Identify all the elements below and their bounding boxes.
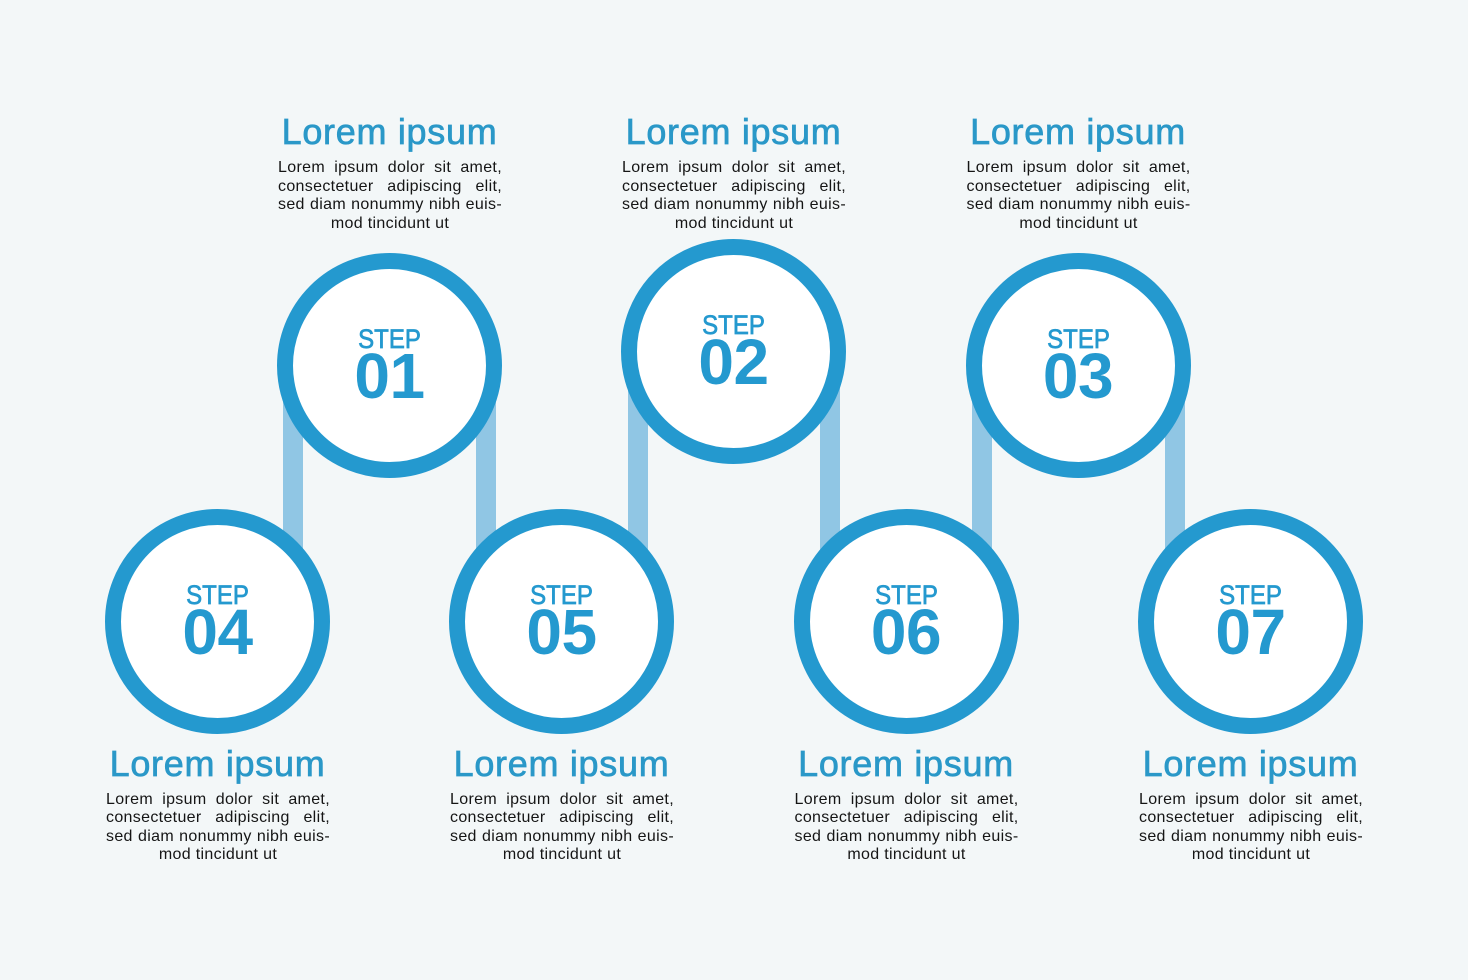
text block: step 02: sed diam nonummy nibh euis- [622,196,846,213]
circle: step 06: STEP [875,580,937,610]
text block: step 07: consectetuer adipiscing elit, [1139,809,1363,826]
text block: step 07: Lorem ipsum dolor sit amet, [1139,791,1363,808]
text block: step 02: consectetuer adipiscing elit, [622,178,846,195]
text block: step 03: sed diam nonummy nibh euis- [966,196,1190,213]
text block: step 06: Lorem ipsum dolor sit amet, [794,791,1018,808]
circle: step 06 [794,508,1018,734]
heading: step 04: Lorem ipsum [110,742,325,784]
connector: step 06 to step 03 [972,390,992,560]
text block: step 06: consectetuer adipiscing elit, [794,809,1018,826]
heading: step 05: Lorem ipsum [454,742,669,784]
circle: step 02: STEP [702,310,765,340]
text block: step 01: mod tincidunt ut [331,215,449,232]
connector: step 03 to step 07 [1165,390,1185,560]
text block: step 05: Lorem ipsum dolor sit amet, [450,791,674,808]
text block: step 04 [106,791,330,863]
circle: step 04 [105,508,330,734]
text block: step 03: consectetuer adipiscing elit, [966,178,1190,195]
text block: step 02: Lorem ipsum dolor sit amet, [622,159,846,176]
text block: step 04: Lorem ipsum dolor sit amet, [106,791,330,808]
text block: step 02: mod tincidunt ut [675,215,793,232]
text block: step 03: mod tincidunt ut [1019,215,1138,232]
heading: step 06: Lorem ipsum [798,742,1014,784]
circle: step 05: 05 [526,596,597,668]
text block: step 07: sed diam nonummy nibh euis- [1139,828,1363,845]
text block: step 04: sed diam nonummy nibh euis- [106,828,330,845]
text block: step 06 [794,791,1018,863]
text block: step 04: consectetuer adipiscing elit, [106,809,330,826]
circle: step 03 [966,252,1190,478]
text block: step 02 [622,159,846,232]
text block: step 04: mod tincidunt ut [159,846,277,863]
heading: step 07: Lorem ipsum [1143,742,1358,784]
text block: step 03: Lorem ipsum dolor sit amet, [966,159,1190,176]
text block: step 06: mod tincidunt ut [847,846,966,863]
text block: step 01: Lorem ipsum dolor sit amet, [278,159,502,176]
circle: step 05: STEP [530,580,593,610]
circle: step 01 [277,252,502,478]
circle: step 07: 07 [1215,596,1286,668]
text block: step 01 [278,159,502,232]
circle: step 03: STEP [1047,324,1109,354]
circle: step 04: 04 [182,596,253,668]
text block: step 05: sed diam nonummy nibh euis- [450,828,674,845]
heading: step 01: Lorem ipsum [282,110,497,152]
text block: step 01: sed diam nonummy nibh euis- [278,196,502,213]
connector: step 01 to step 05 [476,390,496,560]
heading: step 02: Lorem ipsum [626,110,841,152]
text block: step 05: mod tincidunt ut [503,846,621,863]
connector: step 04 to step 01 [283,390,303,560]
text block: step 03 [966,159,1190,232]
circle: step 03: 03 [1043,340,1113,412]
circle: step 05 [449,508,674,734]
heading: step 03: Lorem ipsum [970,110,1186,152]
circle: step 01: 01 [354,340,425,412]
circle: step 07 [1138,508,1363,734]
text block: step 05: consectetuer adipiscing elit, [450,809,674,826]
circle: step 06: 06 [871,596,941,668]
circle: step 01: STEP [358,324,421,354]
text block: step 05 [450,791,674,863]
circle: step 04: STEP [186,580,249,610]
text block: step 01: consectetuer adipiscing elit, [278,178,502,195]
circle: step 02 [621,238,846,464]
circle: step 02: 02 [698,326,769,398]
text block: step 06: sed diam nonummy nibh euis- [794,828,1018,845]
text block: step 07: mod tincidunt ut [1192,846,1310,863]
text block: step 07 [1139,791,1363,863]
circle: step 07: STEP [1219,580,1282,610]
connector: step 02 to step 06 [820,380,840,560]
connector: step 05 to step 02 [628,380,648,560]
